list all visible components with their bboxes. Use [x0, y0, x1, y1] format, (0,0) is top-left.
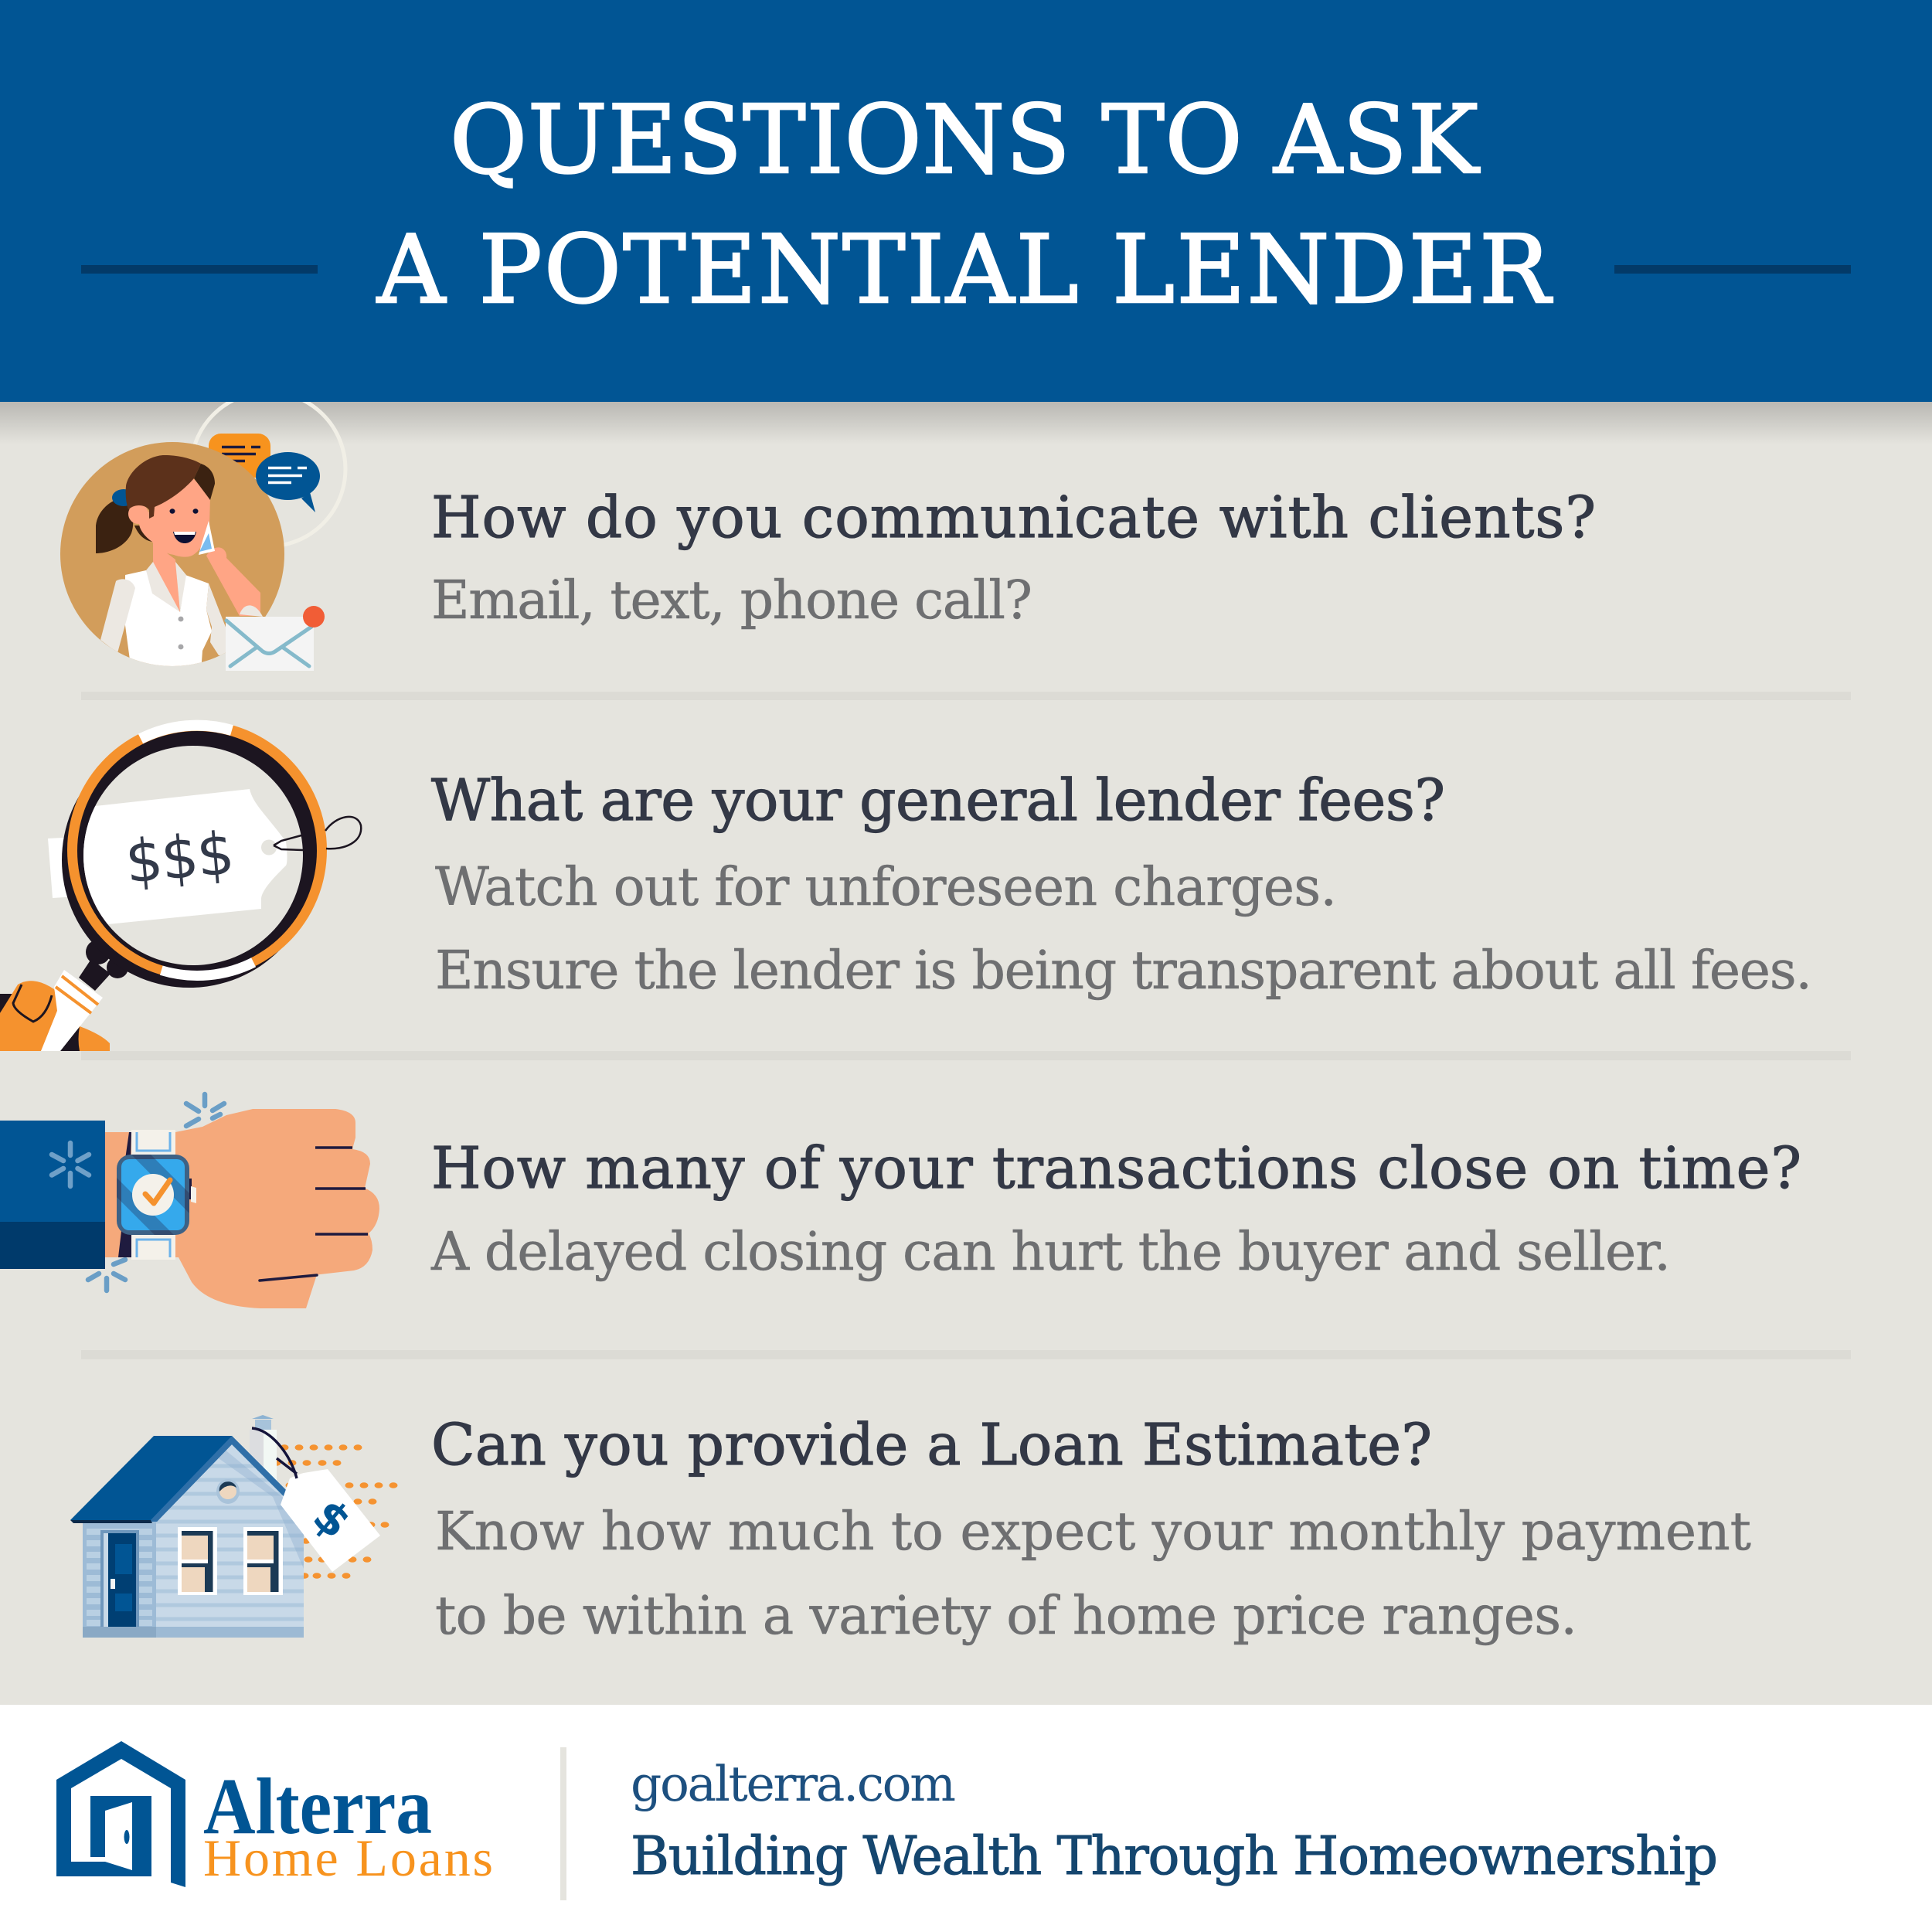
website and tagline: [631, 1756, 1718, 1887]
icon: house with price tag: [70, 1415, 397, 1638]
icon: wrist with smartwatch and check mark: [0, 1094, 379, 1308]
question 2 text block: What are your general lender fees?: [431, 767, 1445, 834]
question 3 text block: A delayed closing can hurt the buyer and seller.: [430, 1222, 1671, 1283]
question 1 text block: How do you communicate with clients?: [431, 485, 1596, 551]
icon: magnifying glass over price tag: $$$: [123, 818, 237, 896]
header band: [0, 0, 1932, 402]
website and tagline: goalterra.com: [631, 1756, 956, 1812]
logo: Alterra Home Loans: Home Loans: [203, 1828, 493, 1887]
icon: house with price tag: $: [303, 1488, 361, 1549]
question 4 text block: Know how much to expect your monthly payment: [435, 1502, 1751, 1563]
question 3 text block: How many of your transactions close on time?: [431, 1135, 1801, 1202]
question 1 text block: Email, text, phone call?: [431, 570, 1032, 631]
website and tagline: Building Wealth Through Homeownership: [631, 1826, 1718, 1887]
title: [376, 85, 1553, 325]
question 1 text block: [431, 485, 1596, 631]
title: QUESTIONS TO ASK: [450, 85, 1480, 195]
question 4 text block: Can you provide a Loan Estimate?: [431, 1412, 1432, 1478]
question 2 text block: Ensure the lender is being transparent about all fees.: [435, 940, 1812, 1002]
icon: woman on phone with speech bubbles and envelope: [60, 392, 345, 672]
question 2 text block: Watch out for unforeseen charges.: [435, 857, 1337, 918]
icon: magnifying glass over price tag: [0, 720, 361, 1051]
question 2 text block: [431, 767, 1812, 1002]
logo: Alterra Home Loans: Alterra: [203, 1762, 432, 1851]
logo: Alterra Home Loans: [56, 1741, 493, 1887]
title: A POTENTIAL LENDER: [376, 215, 1553, 325]
question 3 text block: [430, 1135, 1801, 1283]
footer band: [0, 1705, 1932, 1932]
question 4 text block: [431, 1412, 1751, 1647]
question 4 text block: to be within a variety of home price ranges.: [435, 1586, 1577, 1647]
